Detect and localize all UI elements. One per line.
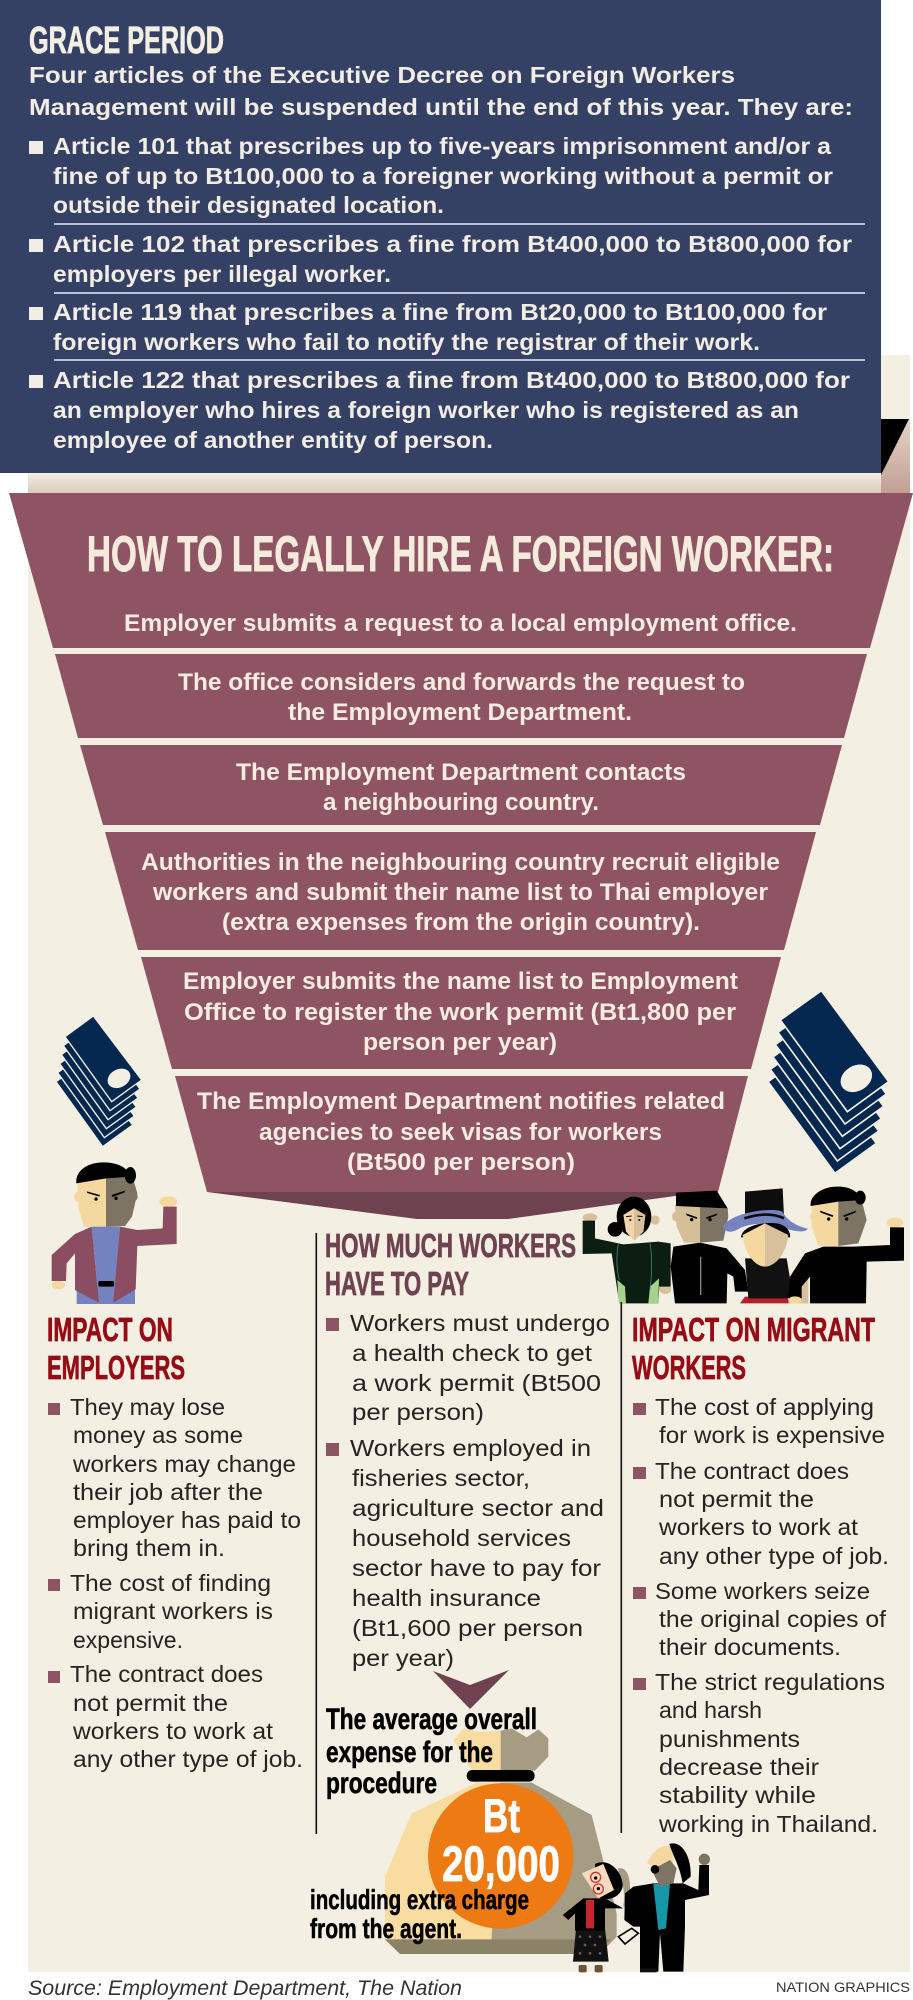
panel: impact on migrant workers: The cost of applying (655, 1394, 874, 1420)
panel: impact on migrant workers: working in Thailand. (658, 1811, 878, 1837)
panel: how much workers have to pay: agriculture sector and (352, 1495, 604, 1521)
funnel step 3 (80, 745, 842, 825)
text: including extra charge: including extra charge (310, 1884, 529, 1915)
text: average overall expense (326, 1703, 537, 1800)
icon: employer figure (52, 1162, 177, 1304)
article 119: foreign workers who fail to notify the registrar of their work. (53, 329, 760, 355)
panel: impact on migrant workers: decrease their (659, 1754, 819, 1780)
panel: impact on migrant workers (632, 1311, 889, 1837)
funnel step 2: The office considers and forwards the request to (178, 669, 745, 696)
panel: impact on migrant workers: punishments (659, 1726, 800, 1752)
panel: impact on migrant workers: not permit the (659, 1486, 814, 1512)
funnel step 4: workers and submit their name list to Thai employer (152, 879, 768, 906)
funnel step 4 (105, 832, 816, 950)
article 122: an employer who hires a foreign worker who is registered as an (53, 397, 799, 423)
source line: Source: Employment Department, The Nation (28, 1977, 462, 2000)
panel: how much workers have to pay: a work permit (Bt500 (352, 1370, 601, 1396)
price circle: Bt 20,000 (428, 1783, 573, 1929)
funnel step 4: Authorities in the neighbouring country recruit eligible (141, 849, 780, 876)
panel: impact on employers: not permit the (73, 1690, 228, 1716)
text: average overall expense: The average overall (326, 1703, 537, 1736)
article 102: employers per illegal worker. (53, 261, 391, 287)
panel: how much workers have to pay: sector have to pay for (352, 1555, 601, 1581)
funnel step 4: (extra expenses from the origin country). (222, 909, 700, 936)
funnel step 2 (55, 654, 867, 738)
funnel (9, 493, 913, 1219)
heading: impact on employers (47, 1311, 185, 1386)
figure: woman in green (583, 1197, 671, 1303)
price circle: Bt 20,000: 20,000 (442, 1836, 560, 1892)
panel: how much workers have to pay: per person) (352, 1399, 484, 1425)
article 102: Article 102 that prescribes a fine from Bt400,000 to Bt800,000 for (53, 231, 852, 257)
panel: impact on migrant workers: stability while (659, 1782, 816, 1808)
panel: impact on migrant workers: and harsh (659, 1697, 762, 1723)
funnel step 3: The Employment Department contacts (236, 759, 686, 786)
article 101 (29, 133, 833, 218)
panel: how much workers have to pay (325, 1227, 610, 1671)
panel: impact on employers: workers to work at (72, 1718, 273, 1744)
panel: impact on employers: The contract does (70, 1661, 263, 1687)
icon: money stack right (768, 991, 889, 1173)
panel: impact on employers: They may lose (70, 1394, 225, 1420)
grace period intro: Four articles of the Executive Decree on Foreign Workers (29, 62, 735, 88)
funnel step 5: Office to register the work permit (Bt1,800 per (184, 999, 736, 1026)
panel: impact on migrant workers: the original copies of (659, 1606, 886, 1632)
panel: impact on migrant workers: for work is expensive (659, 1422, 885, 1448)
panel: impact on employers: expensive. (73, 1627, 183, 1653)
panel: how much workers have to pay: a health check to get (352, 1340, 593, 1366)
heading: how much workers have to pay (325, 1227, 576, 1302)
funnel step 6: The Employment Department notifies related (197, 1088, 725, 1115)
panel: how much workers have to pay: health insurance (352, 1585, 541, 1611)
panel: impact on migrant workers: their documents. (659, 1634, 841, 1660)
panel: impact on employers: employer has paid to (73, 1507, 301, 1533)
panel: how much workers have to pay: Workers employed in (350, 1435, 591, 1461)
panel: grace period (0, 0, 881, 473)
panel: how much workers have to pay: (Bt1,600 per person (352, 1615, 583, 1641)
text: average overall expense: expense for the (326, 1736, 493, 1769)
price circle: Bt 20,000: Bt (483, 1789, 520, 1842)
heading: how much workers have to pay: HAVE TO PAY (325, 1265, 469, 1302)
article 122: employee of another entity of person. (53, 427, 493, 453)
panel: how much workers have to pay: household services (352, 1525, 571, 1551)
article 119: Article 119 that prescribes a fine from Bt20,000 to Bt100,000 for (53, 299, 827, 325)
text: including extra charge (310, 1884, 529, 1944)
article 101: fine of up to Bt100,000 to a foreigner working without a permit or (53, 163, 833, 189)
panel: impact on migrant workers: The contract does (655, 1458, 849, 1484)
panel: impact on employers: any other type of job. (73, 1746, 303, 1772)
funnel step 6: (Bt500 per person) (347, 1149, 575, 1176)
article 102 (29, 231, 852, 287)
heading: impact on migrant workers: WORKERS (632, 1349, 746, 1386)
funnel step 5: person per year) (363, 1029, 557, 1056)
figure: man in cap (671, 1191, 748, 1303)
arrow: chevron down (433, 1670, 509, 1709)
funnel step 6: agencies to seek visas for workers (259, 1119, 662, 1146)
panel: impact on employers: bring them in. (73, 1535, 225, 1561)
icon: money stack left (56, 1016, 142, 1147)
figure: woman with glasses (563, 1862, 630, 1972)
panel: impact on employers: their job after the (73, 1479, 263, 1505)
text: including extra charge: from the agent. (310, 1913, 462, 1944)
panel: impact on employers: workers may change (72, 1451, 296, 1477)
article 101: Article 101 that prescribes up to five-years imprisonment and/or a (53, 133, 832, 159)
funnel step 5 (141, 957, 781, 1069)
grace period intro: Management will be suspended until the end of this year. They are: (29, 94, 853, 120)
shadow triangle (881, 419, 909, 475)
panel: impact on migrant workers: workers to work at (658, 1514, 858, 1540)
credit: nation graphics: NATION GRAPHICS (776, 1979, 910, 1995)
panel: how much workers have to pay: fisheries sector, (352, 1465, 530, 1491)
funnel step 6 (175, 1076, 748, 1192)
figure: man with phone (618, 1843, 710, 1972)
funnel step 1 with title: Employer submits a request to a local employment office. (124, 610, 797, 637)
heading: grace period: GRACE PERIOD (29, 20, 224, 62)
panel: how much workers have to pay: per year) (352, 1645, 454, 1671)
icon: migrant workers group (583, 1187, 904, 1304)
icon: couple figures (563, 1843, 710, 1972)
article 101: outside their designated location. (53, 192, 444, 218)
panel: impact on employers: migrant workers is (73, 1598, 273, 1624)
funnel step 5: Employer submits the name list to Employment (183, 968, 738, 995)
grace period intro (29, 62, 853, 120)
panel: impact on employers: The cost of finding (70, 1570, 271, 1596)
column dividers (316, 1233, 622, 1834)
panel: impact on migrant workers: Some workers seize (655, 1578, 870, 1604)
article 122 (29, 367, 850, 453)
funnel step 1 with title (9, 493, 913, 648)
panel: impact on migrant workers: The strict regulations (655, 1669, 885, 1695)
heading: how much workers have to pay: HOW MUCH WORKERS (325, 1227, 576, 1264)
heading: impact on employers: IMPACT ON (47, 1311, 173, 1348)
article 122: Article 122 that prescribes a fine from Bt400,000 to Bt800,000 for (53, 367, 850, 393)
figure: man with raised arm (788, 1187, 904, 1304)
panel: impact on migrant workers: any other type of job. (659, 1543, 889, 1569)
cream background panel (28, 355, 910, 1972)
heading: impact on migrant workers (632, 1311, 875, 1386)
panel: impact on employers: money as some (73, 1422, 243, 1448)
heading: impact on employers: EMPLOYERS (47, 1349, 185, 1386)
funnel step 3: a neighbouring country. (323, 789, 599, 816)
text: average overall expense: procedure (326, 1767, 437, 1800)
panel: how much workers have to pay: Workers must undergo (350, 1310, 610, 1336)
article 119 (29, 299, 827, 355)
panel: impact on employers (47, 1311, 303, 1772)
icon: money bag (385, 1728, 617, 1954)
funnel step 2: the Employment Department. (288, 699, 632, 726)
funnel tip shadow (207, 1192, 718, 1219)
figure: woman in hat (723, 1188, 808, 1303)
